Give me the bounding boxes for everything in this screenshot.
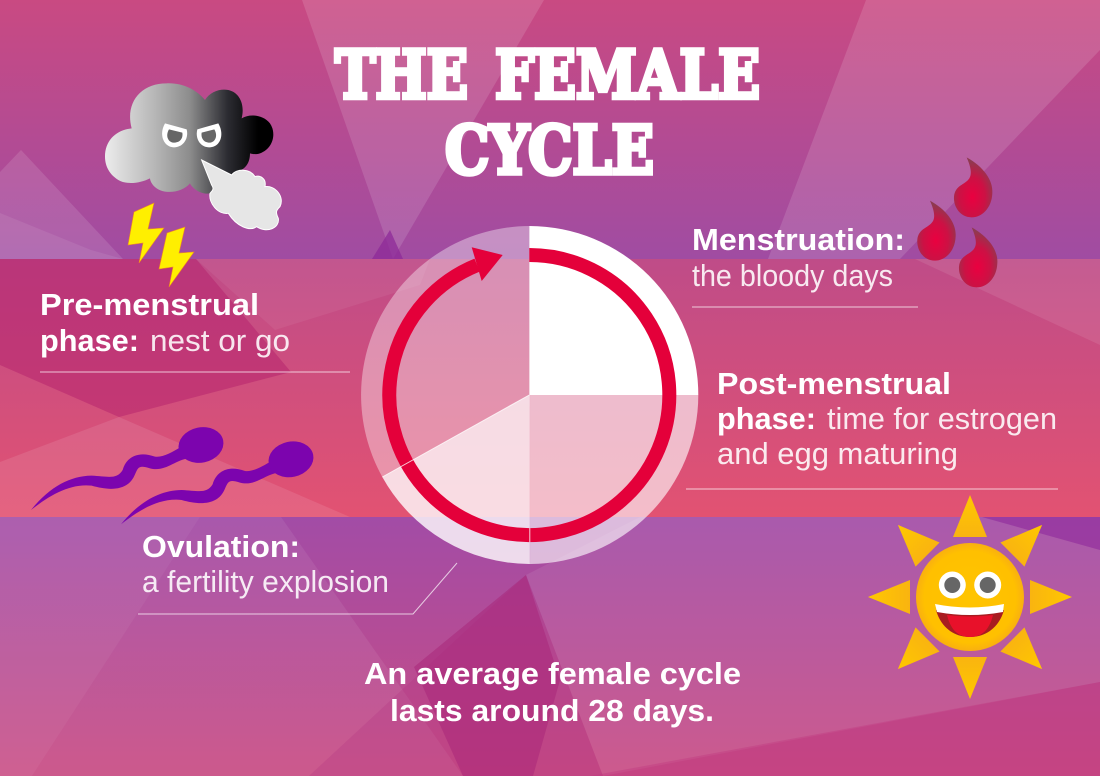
text block: average cycle length: An average female cycle — [364, 656, 741, 691]
text block: menstruation: Menstruation: — [692, 222, 905, 257]
text block: post-menstrual phase — [686, 366, 1058, 489]
icon: sperm cells — [31, 423, 317, 524]
icon: blood drops — [917, 157, 997, 287]
title: CYCLE — [445, 112, 654, 190]
chart: cycle wheel — [361, 226, 698, 564]
icon: smiling sun — [868, 495, 1072, 699]
text block: post-menstrual phase: Post-menstrual — [717, 366, 951, 401]
text block: average cycle length — [364, 656, 741, 728]
text block: average cycle length: lasts around 28 days. — [390, 693, 714, 728]
text block: post-menstrual phase: time for estrogen — [827, 401, 1057, 436]
segment: menstruation — [529, 226, 698, 395]
text block: ovulation: Ovulation: — [142, 529, 300, 564]
arrow: clockwise cycle — [389, 247, 669, 535]
icon: angry storm cloud — [105, 83, 281, 230]
icon: cloud eyes — [162, 123, 221, 147]
title: THE — [335, 36, 468, 114]
title: FEMALE — [495, 36, 760, 114]
text block: post-menstrual phase: and egg maturing — [717, 436, 958, 471]
wheel divider lines — [382, 395, 530, 564]
icon: lightning bolts — [128, 203, 194, 287]
text block: ovulation — [138, 529, 457, 614]
text block: pre-menstrual phase: Pre-menstrual — [40, 287, 259, 322]
icon: cloud breath puff — [202, 160, 281, 230]
segment: pre-menstrual — [361, 226, 529, 477]
segment: ovulation — [382, 395, 529, 564]
text block: pre-menstrual phase: nest or go — [150, 323, 290, 358]
text block: pre-menstrual phase — [40, 287, 350, 372]
text block: pre-menstrual phase: phase: — [40, 323, 139, 358]
text block: ovulation: a fertility explosion — [142, 564, 389, 599]
segment: post-menstrual — [530, 395, 698, 564]
text block: menstruation — [692, 222, 918, 307]
title — [335, 36, 760, 190]
text block: post-menstrual phase: phase: — [717, 401, 816, 436]
text block: menstruation: the bloody days — [692, 258, 893, 293]
